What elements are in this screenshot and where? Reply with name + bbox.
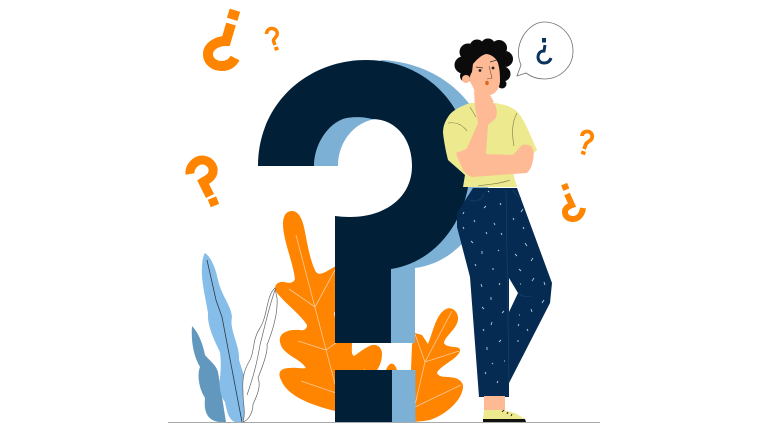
hair bbox=[454, 38, 513, 88]
shirt bbox=[443, 103, 537, 187]
outlined leaf bbox=[243, 288, 277, 422]
inverted question mark top left bbox=[208, 9, 240, 66]
blue plant bbox=[192, 253, 249, 422]
leg and shoe bbox=[483, 396, 526, 422]
thought bubble bbox=[517, 22, 573, 79]
face bbox=[462, 54, 500, 106]
question mark left bbox=[190, 160, 219, 207]
inverted question mark right bbox=[561, 183, 583, 219]
small orange leaf bbox=[386, 308, 463, 422]
question mark right bbox=[581, 131, 592, 155]
pants bbox=[457, 188, 552, 397]
giant question mark navy front bbox=[258, 60, 470, 422]
giant question mark blue shadow bbox=[314, 60, 490, 422]
large orange leaf bbox=[275, 211, 382, 415]
person bbox=[443, 38, 552, 422]
small question mark top bbox=[266, 28, 279, 51]
arms crossed and hand on chin bbox=[456, 91, 534, 177]
